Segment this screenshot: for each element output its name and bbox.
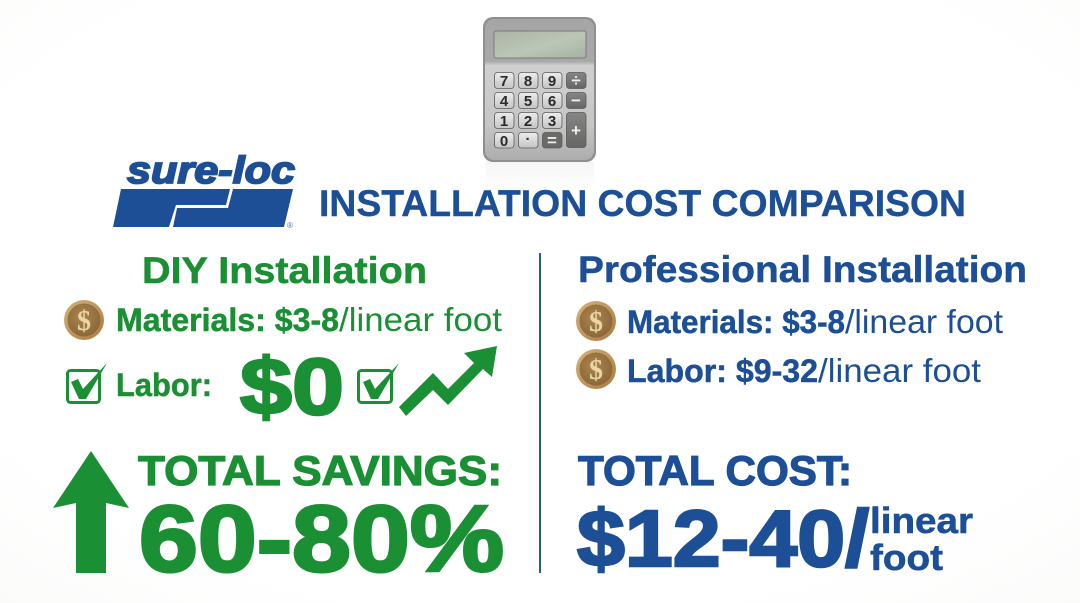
- icon: calculator: ÷: [571, 71, 581, 90]
- logo: sure-loc: sure-loc: [127, 150, 295, 192]
- text: labor cost: /linear foot: [818, 352, 981, 389]
- text: total cost label: TOTAL COST:: [578, 447, 852, 494]
- text: materials cost: Materials: $3-8: [627, 304, 845, 340]
- icon: calculator: −: [571, 91, 581, 110]
- icon: coin: [576, 301, 616, 341]
- text: linear foot unit: [870, 500, 973, 578]
- icon: calculator: 1: [500, 113, 508, 130]
- icon: checkbox: [358, 363, 399, 402]
- icon: calculator: 9: [548, 73, 556, 90]
- icon: calculator: 4: [500, 93, 509, 110]
- icon: calculator: [483, 17, 596, 192]
- icon: coin: $: [77, 306, 91, 337]
- text: materials cost: [627, 303, 1003, 340]
- text: savings percentage: 60-80%: [139, 486, 504, 591]
- text: materials cost: [116, 301, 502, 338]
- icon: coin: [576, 349, 616, 389]
- icon: coin: $: [589, 307, 603, 338]
- title: INSTALLATION COST COMPARISON: [319, 183, 966, 224]
- icon: calculator: 7: [500, 73, 508, 90]
- icon: checkbox: [68, 363, 107, 402]
- text: zero labor cost: $0: [240, 342, 344, 431]
- icon: calculator: ·: [526, 131, 530, 148]
- icon: calculator: 5: [524, 93, 532, 110]
- logo: sure-loc: [113, 150, 295, 230]
- icon: calculator: 3: [548, 113, 556, 130]
- icon: coin: [64, 300, 104, 340]
- text: total cost value: $12-40/: [577, 494, 869, 583]
- divider: [539, 253, 541, 573]
- text: labor cost: [627, 352, 981, 389]
- icon: calculator: =: [547, 131, 557, 150]
- panel: professional installation: [576, 249, 1027, 583]
- icon: coin: $: [589, 355, 603, 386]
- icon: rising trend arrow: [399, 346, 497, 416]
- text: materials cost: Materials: $3-8: [116, 302, 339, 338]
- text: linear foot unit: foot: [870, 537, 943, 578]
- icon: calculator: 2: [524, 113, 532, 130]
- panel: DIY installation: [53, 250, 504, 591]
- icon: calculator: 0: [500, 133, 508, 150]
- text: total savings label: TOTAL SAVINGS:: [138, 447, 502, 494]
- icon: calculator: 8: [524, 73, 532, 90]
- icon: calculator: +: [571, 121, 581, 140]
- icon: calculator: 6: [548, 93, 556, 110]
- text: labor: Labor:: [116, 367, 212, 403]
- logo: sure-loc: ®: [287, 221, 293, 230]
- icon: up arrow: [53, 451, 129, 573]
- text: linear foot unit: linear: [870, 500, 973, 541]
- heading: DIY Installation: DIY Installation: [142, 250, 427, 291]
- text: materials cost: /linear foot: [339, 301, 502, 338]
- text: labor cost: Labor: $9-32: [627, 353, 818, 389]
- text: materials cost: /linear foot: [845, 303, 1003, 340]
- heading: Professional Installation: Professional Installation: [578, 249, 1027, 290]
